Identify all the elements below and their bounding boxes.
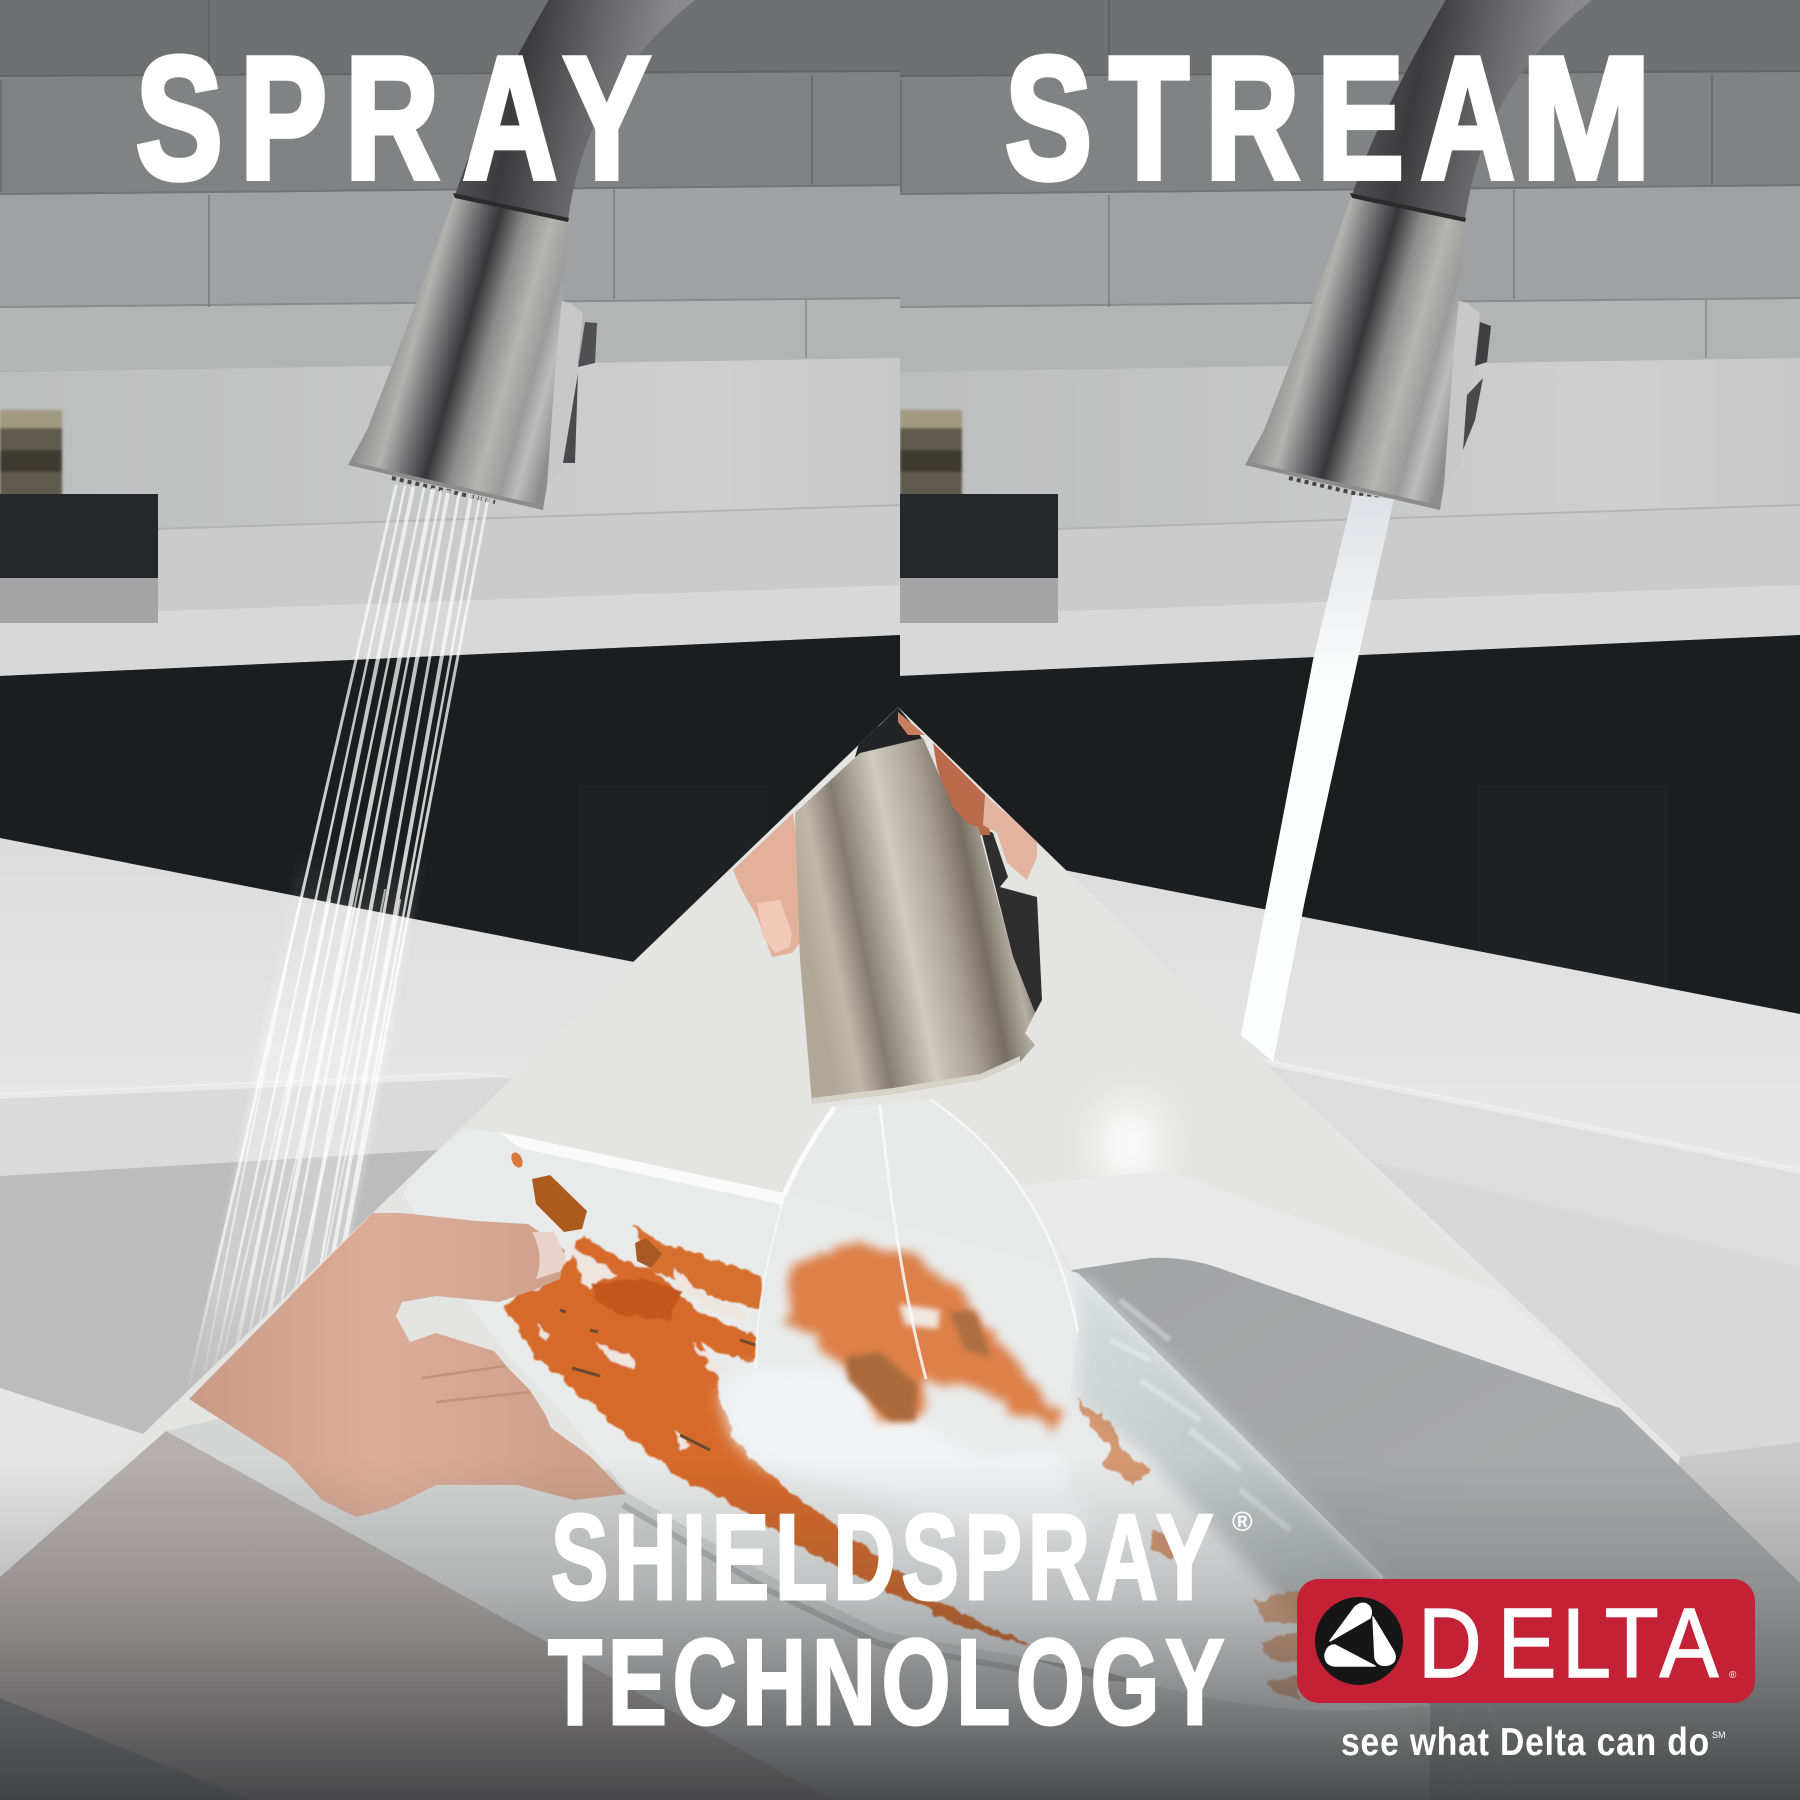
heading: shieldspray technology [548, 1489, 1253, 1750]
heading: shieldspray technology: TECHNOLOGY [548, 1614, 1230, 1750]
sink rim [1125, 1174, 1139, 1176]
heading: stream: STREA [1005, 21, 1515, 215]
heading: stream: M [1521, 21, 1651, 216]
heading: spray: SPRAY [136, 21, 650, 215]
logo background [1297, 1579, 1755, 1703]
heading: shieldspray technology: ® [1232, 1506, 1253, 1537]
panel: spray [0, 0, 900, 1577]
food chunk [532, 1175, 587, 1232]
tagline: see what Delta can do [1341, 1721, 1710, 1764]
sprayer cap [855, 707, 923, 757]
lip highlight [0, 1074, 495, 1099]
lower sink surface [1678, 1442, 1800, 1582]
sprayer button [980, 827, 1042, 1013]
plate shadow [623, 1505, 1018, 1669]
faucet head [1245, 0, 1597, 510]
sauce residue on plate [1075, 1400, 1300, 1700]
sink basin [1370, 1161, 1800, 1457]
food chunk [635, 1238, 662, 1268]
left finger [733, 813, 810, 957]
water dome [720, 1100, 1100, 1530]
lower left surface [0, 1431, 832, 1800]
logo: delta: ® [1729, 1670, 1737, 1681]
countertop lip [0, 1074, 520, 1176]
bottom shadow gradient [0, 1460, 1800, 1800]
spray water [188, 486, 488, 1395]
lip highlight [1260, 1058, 1800, 1174]
fingertip above cap [898, 712, 925, 735]
light glare [1100, 1105, 1160, 1185]
wordmark: DELTA [1418, 1589, 1718, 1698]
kitchen backdrop [0, 0, 900, 1577]
sauce smear [504, 1151, 1032, 1646]
sink basin interior [1038, 1258, 1800, 1790]
water dribble [1420, 1705, 1510, 1800]
thumb [290, 1213, 566, 1316]
faucet head [348, 0, 700, 510]
logo: delta [1297, 1579, 1755, 1703]
panel: shieldspray technology [0, 700, 1800, 1800]
heading: shieldspray technology: SHIELDSPRAY [551, 1489, 1219, 1625]
plate [403, 1129, 1430, 1711]
lower left corner [0, 1698, 190, 1776]
stream water [1241, 495, 1394, 1062]
specks [560, 1310, 755, 1450]
icon: delta mark [1315, 1597, 1403, 1685]
palm and fingers [189, 1213, 626, 1517]
lower counter band [166, 1418, 1430, 1774]
kitchen backdrop [900, 0, 1800, 1465]
tagline: SM [1712, 1730, 1726, 1740]
panel: stream [900, 0, 1800, 1583]
sauce spot [509, 1151, 525, 1169]
sprayer head [795, 738, 1035, 1104]
sink basin [0, 1150, 439, 1434]
countertop lip [1280, 1076, 1800, 1266]
counter background [143, 707, 1067, 1434]
right finger [933, 743, 1037, 880]
